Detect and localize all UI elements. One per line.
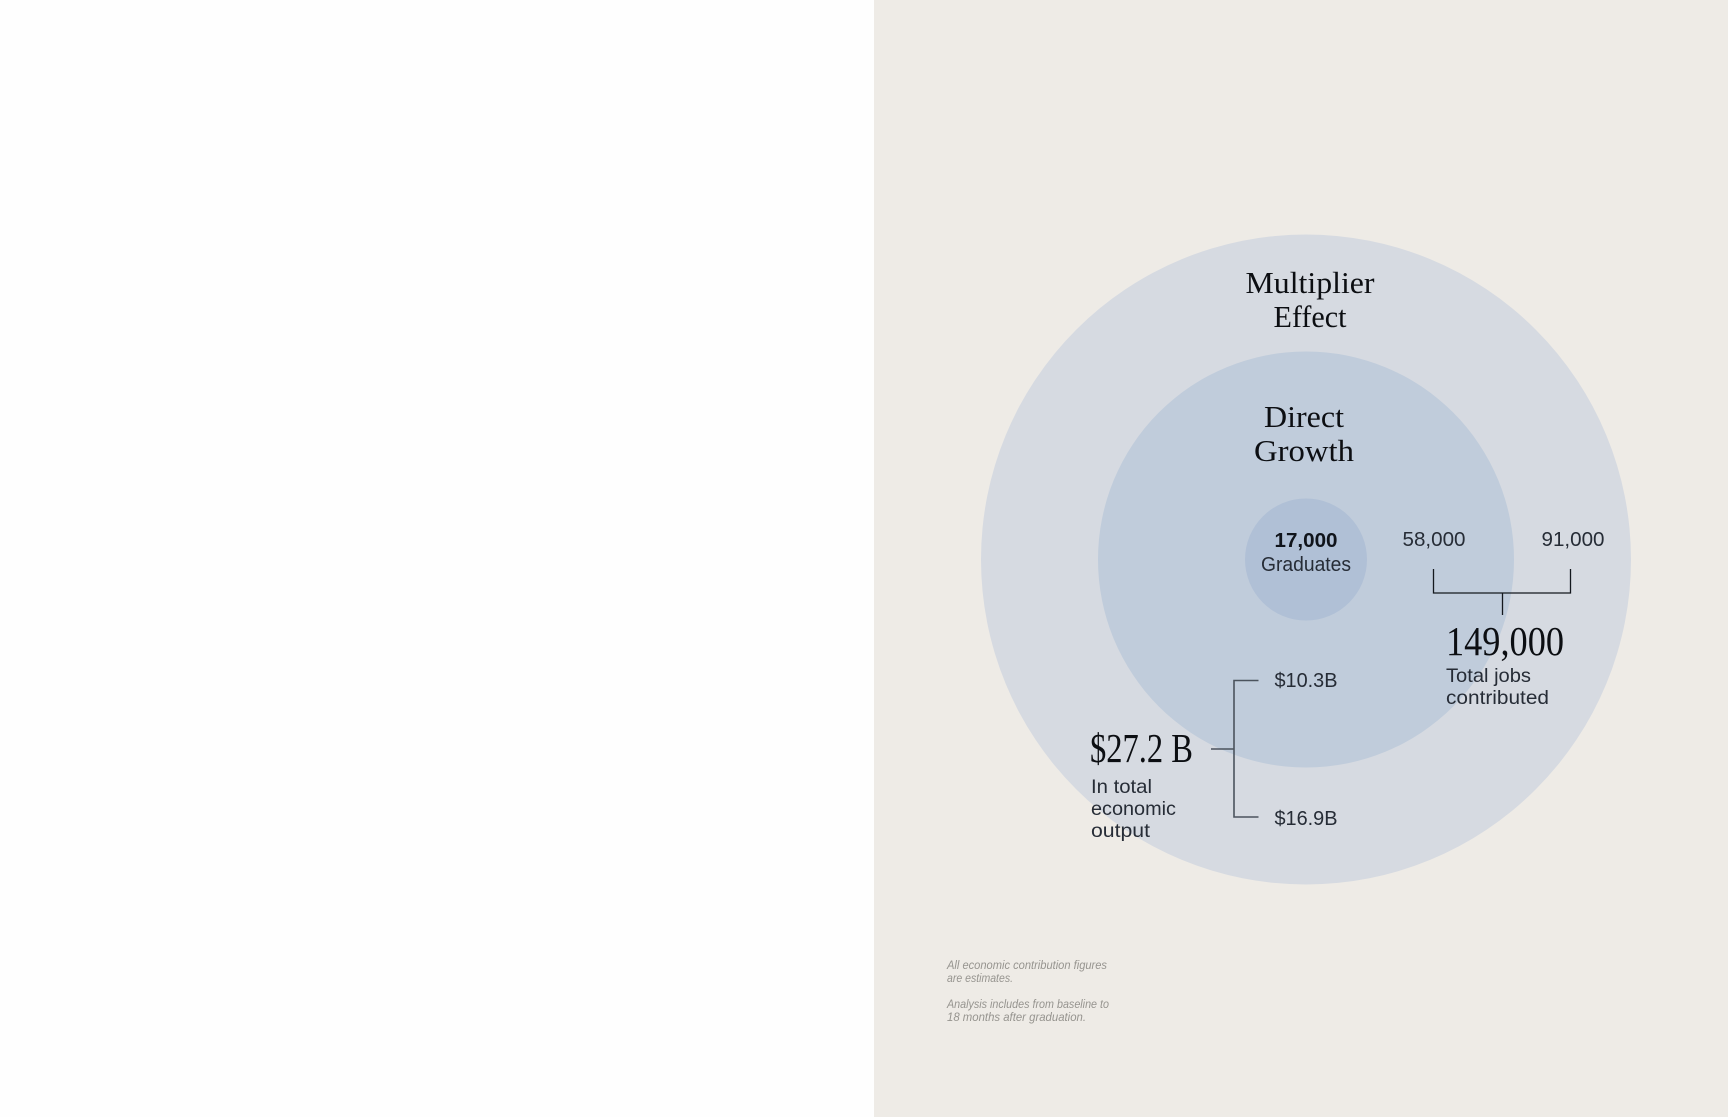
stat: $27.2 B total economic output: In total	[1091, 776, 1152, 798]
bracket: economic output	[1211, 680, 1258, 817]
label: 17,000 graduates: Graduates	[1261, 554, 1351, 576]
stat: $27.2 B total economic output	[1090, 725, 1193, 842]
heading: Direct Growth: Direct	[1264, 399, 1344, 434]
label: 91,000: 91,000	[1542, 529, 1604, 551]
bracket: jobs	[1434, 569, 1570, 615]
nested circle diagram	[981, 234, 1631, 884]
label: $16.9B: $16.9B	[1274, 808, 1338, 830]
heading: Multiplier Effect: Effect	[1274, 299, 1347, 334]
left blank page	[0, 0, 874, 1117]
label: 58,000: 58,000	[1402, 529, 1466, 551]
inner circle: graduates	[1245, 498, 1367, 620]
heading: Multiplier Effect	[1246, 265, 1375, 334]
stat: 149,000 total jobs: contributed	[1446, 687, 1549, 709]
label: 17,000 graduates	[1261, 530, 1351, 576]
footnotes: 18 months after graduation.	[947, 1010, 1086, 1024]
heading: Direct Growth: Growth	[1254, 433, 1355, 468]
stat: 149,000 total jobs	[1446, 618, 1564, 709]
heading: Multiplier Effect: Multiplier	[1246, 265, 1375, 300]
stat: $27.2 B total economic output: economic	[1091, 798, 1176, 820]
stat: $27.2 B total economic output: $27.2 B	[1090, 725, 1193, 771]
stat: 149,000 total jobs: Total jobs	[1446, 665, 1531, 687]
label: $10.3B: $10.3B	[1274, 670, 1338, 692]
footnotes	[946, 958, 1109, 1024]
right panel background	[874, 0, 1728, 1117]
middle circle: direct growth	[1098, 352, 1514, 768]
footnotes: All economic contribution figures	[946, 958, 1107, 972]
stat: $27.2 B total economic output: output	[1091, 820, 1151, 842]
footnotes: Analysis includes from baseline to	[946, 997, 1109, 1011]
footnotes: are estimates.	[947, 971, 1013, 985]
heading: Direct Growth	[1254, 399, 1355, 468]
label: 17,000 graduates: 17,000	[1274, 530, 1338, 552]
outer circle: multiplier effect	[981, 234, 1631, 884]
stat: 149,000 total jobs: 149,000	[1446, 618, 1564, 664]
